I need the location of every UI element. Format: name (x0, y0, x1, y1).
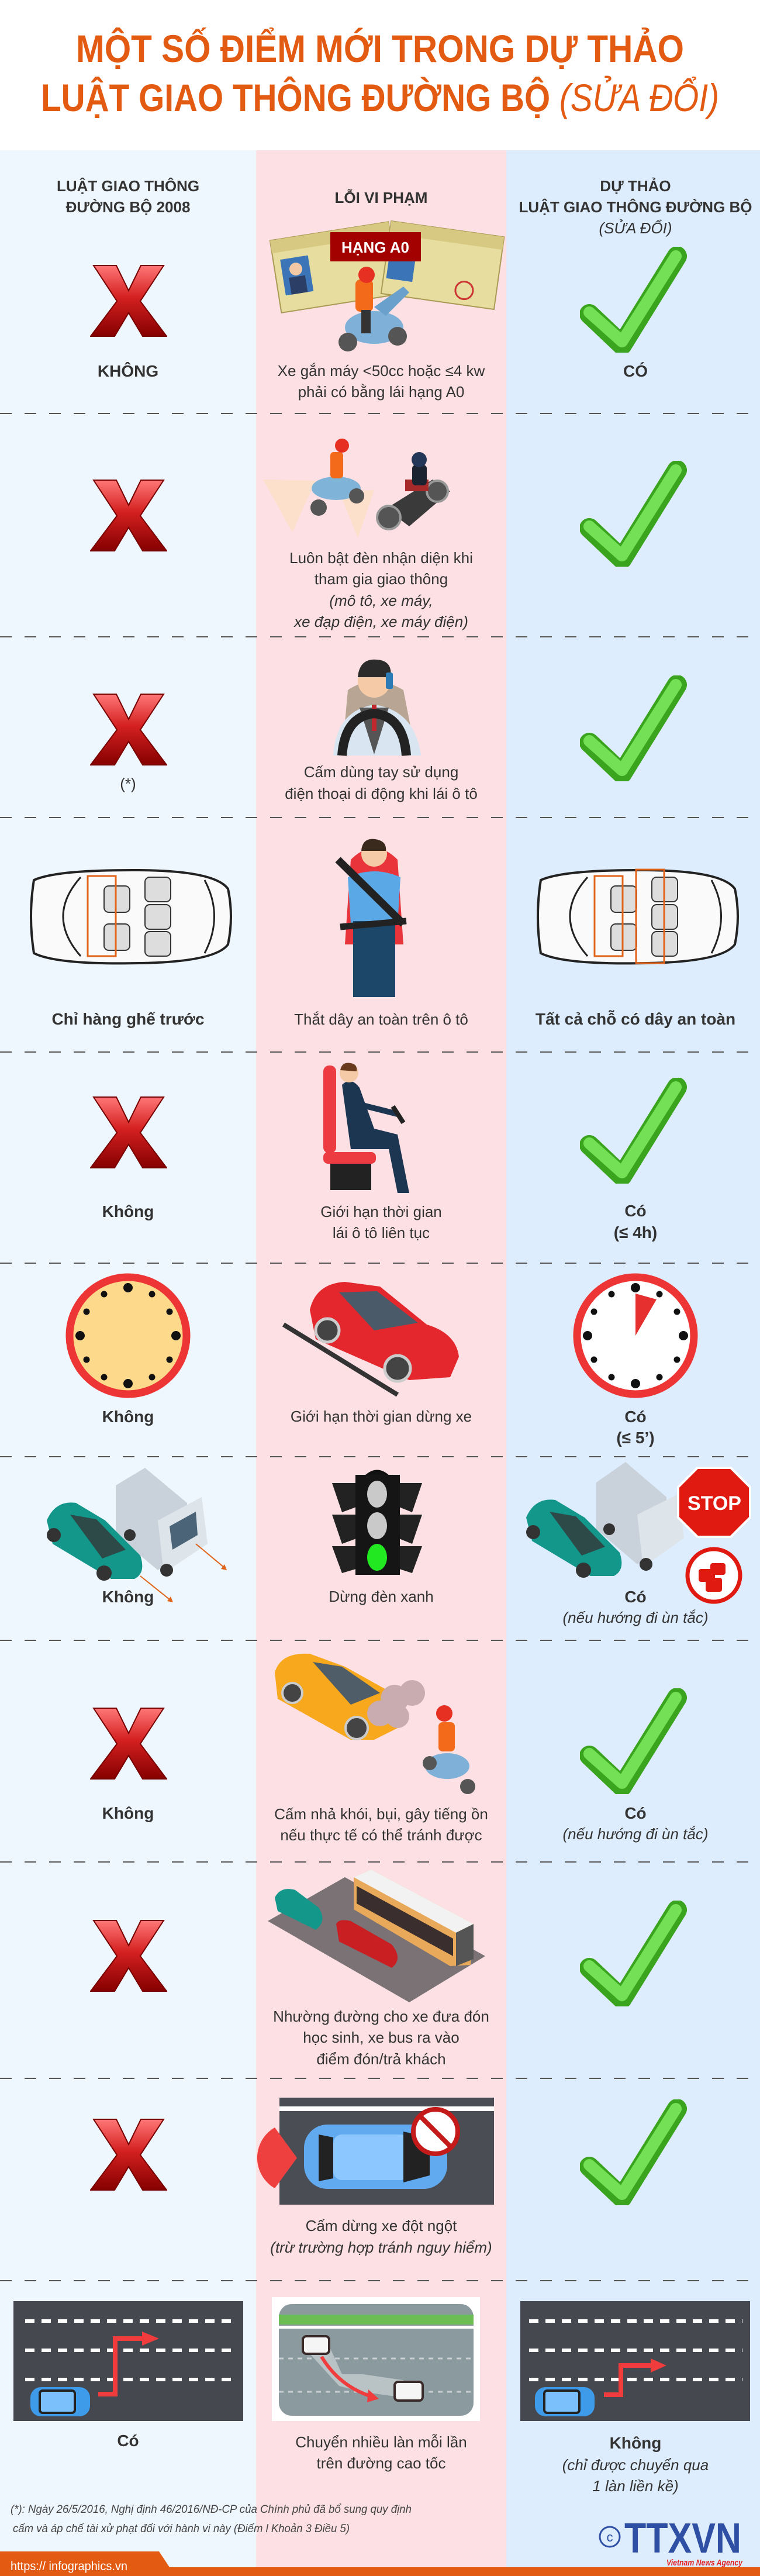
title (41, 27, 719, 119)
column header: loi vi pham: LỖI VI PHẠM (335, 189, 427, 206)
text: row 10: Cấm dừng xe đột ngột (306, 2217, 457, 2234)
row 8: smoke (91, 1654, 709, 1844)
text: row 1: phải có bằng lái hạng A0 (298, 383, 464, 401)
text: row 6: Giới hạn thời gian dừng xe (291, 1408, 472, 1425)
illustration: highway lane change (272, 2297, 480, 2421)
row 1: license (91, 221, 677, 401)
illustration: road one lane (520, 2301, 750, 2421)
logo: TTXVN: Vietnam News Agency (666, 2558, 743, 2568)
column header: du thao (519, 177, 752, 237)
row 9: school bus (91, 1870, 677, 2068)
text: row 5: lái ô tô liên tục (333, 1224, 430, 1242)
logo: TTXVN (600, 2515, 743, 2568)
text: row 2: xe đạp điện, xe máy điện) (293, 613, 468, 630)
row 3: phone (91, 660, 677, 802)
text: row 11: trên đường cao tốc (317, 2454, 445, 2472)
illustration: motorbikes (263, 439, 450, 538)
label right: 1 làn liền kề) (592, 2477, 679, 2495)
text: row 9: học sinh, xe bus ra vào (303, 2029, 460, 2046)
illustration: licenses and scooter (270, 221, 504, 351)
text: row 3: Cấm dùng tay sử dụng (304, 763, 458, 781)
row 5: driving time (91, 1063, 677, 1242)
label left: Không (102, 1804, 154, 1822)
icon: X (91, 2119, 167, 2190)
label right: Có (624, 1408, 647, 1426)
footnote: cấm và áp chế tài xử phạt đối với hành vi này (Điểm l Khoản 3 Điều 5) (13, 2523, 350, 2535)
icon: X (91, 1097, 167, 1168)
icon: clock empty (70, 1277, 186, 1394)
label left: (*) (120, 775, 136, 792)
icon: check (589, 256, 677, 345)
column header: luat 2008 (57, 177, 199, 216)
icon: X (91, 480, 167, 551)
row 7: green light (47, 1462, 750, 1626)
icon: check (589, 685, 677, 774)
text: row 5: Giới hạn thời gian (320, 1203, 442, 1220)
label left: Không (102, 1588, 154, 1606)
text: row 2: Luôn bật đèn nhận diện khi (289, 549, 473, 567)
column header: luat 2008: LUẬT GIAO THÔNG (57, 177, 199, 195)
icon: check (589, 1698, 677, 1787)
text: row 10: (trừ trường hợp tránh nguy hiểm) (270, 2239, 492, 2256)
footnote: (*): Ngày 26/5/2016, Nghị định 46/2016/NĐ-CP của Chính phủ đã bổ sung quy định (11, 2503, 412, 2516)
text: row 8: nếu thực tế có thể tránh được (280, 1826, 482, 1844)
footer bar: https:// infographics.vn (11, 2560, 127, 2573)
text: row 1: Xe gắn máy <50cc hoặc ≤4 kw (278, 362, 485, 380)
label right: (chỉ được chuyển qua (562, 2456, 709, 2474)
label right: Có (624, 1588, 647, 1606)
logo: TTXVN: TTXVN (624, 2515, 741, 2562)
text: row 4: Thắt dây an toàn trên ô tô (294, 1011, 468, 1028)
label left: Không (102, 1408, 154, 1426)
text: row 9: Nhường đường cho xe đưa đón (273, 2008, 489, 2025)
icon: X (91, 265, 167, 336)
title: LUẬT GIAO THÔNG ĐƯỜNG BỘ (SỬA ĐỔI) (41, 75, 719, 119)
label right: Không (610, 2434, 661, 2452)
row 11: lane change (13, 2297, 750, 2495)
illustration: seated driver (323, 1063, 409, 1193)
illustration: car sudden stop (257, 2098, 494, 2205)
illustration: driver with phone (333, 660, 421, 756)
label right: Tất cả chỗ có dây an toàn (536, 1010, 735, 1028)
icon: traffic light (332, 1470, 422, 1575)
label left: KHÔNG (98, 361, 158, 380)
label left: Có (117, 2432, 139, 2450)
text: row 8: Cấm nhả khói, bụi, gây tiếng ồn (274, 1805, 488, 1823)
label right: (≤ 5’) (616, 1429, 655, 1447)
label right: (nếu hướng đi ùn tắc) (562, 1825, 709, 1843)
label right: CÓ (623, 362, 648, 380)
illustration: red car parked (284, 1282, 459, 1395)
column header: du thao: (SỬA ĐỔI) (599, 219, 672, 237)
illustration: road multiple lanes (13, 2301, 243, 2421)
icon: check (589, 470, 677, 559)
row 6: parking time (70, 1277, 694, 1447)
icon: X (91, 1920, 167, 1991)
text: row 9: điểm đón/trả khách (316, 2050, 446, 2068)
row 2: headlight (91, 439, 677, 630)
logo: TTXVN: c (607, 2530, 613, 2544)
title: MỘT SỐ ĐIỂM MỚI TRONG DỰ THẢO (76, 27, 684, 70)
illustration: car truck stop sign: STOP (688, 1492, 741, 1515)
icon: car top all seats (538, 870, 738, 963)
icon: check (589, 1087, 677, 1176)
illustration: licenses and scooter: HẠNG A0 (341, 239, 409, 256)
icon: X (91, 694, 167, 765)
text: row 7: Dừng đèn xanh (329, 1588, 434, 1605)
illustration: yellow car and scooter (275, 1654, 475, 1794)
label right: Có (624, 1202, 647, 1220)
footer bar (0, 2551, 760, 2576)
label right: (≤ 4h) (614, 1223, 657, 1242)
icon: check (589, 2109, 677, 2198)
label left: Không (102, 1202, 154, 1220)
illustration: car truck stop sign (526, 1462, 750, 1602)
label right: (nếu hướng đi ùn tắc) (562, 1609, 709, 1626)
row 4: seatbelt (31, 839, 738, 1028)
column header: luat 2008: ĐƯỜNG BỘ 2008 (66, 198, 190, 216)
icon: X (91, 1708, 167, 1779)
illustration: car and truck left (47, 1468, 227, 1602)
text: row 2: tham gia giao thông (315, 570, 448, 588)
icon: clock 5 minutes (577, 1277, 694, 1394)
footnote (11, 2503, 412, 2535)
icon: car top front seats (31, 870, 231, 963)
illustration: man with seatbelt (338, 839, 406, 997)
icon: check (589, 1910, 677, 1999)
illustration: bus and cars on road (268, 1870, 485, 2002)
label right: Có (624, 1804, 647, 1822)
text: row 11: Chuyển nhiều làn mỗi lần (295, 2433, 467, 2451)
text: row 2: (mô tô, xe máy, (329, 592, 433, 609)
label left: Chỉ hàng ghế trước (51, 1010, 205, 1028)
column header: du thao: DỰ THẢO (600, 177, 671, 195)
row 10: sudden stop (91, 2098, 677, 2256)
column header: du thao: LUẬT GIAO THÔNG ĐƯỜNG BỘ (519, 198, 752, 216)
text: row 3: điện thoại di động khi lái ô tô (285, 785, 478, 802)
